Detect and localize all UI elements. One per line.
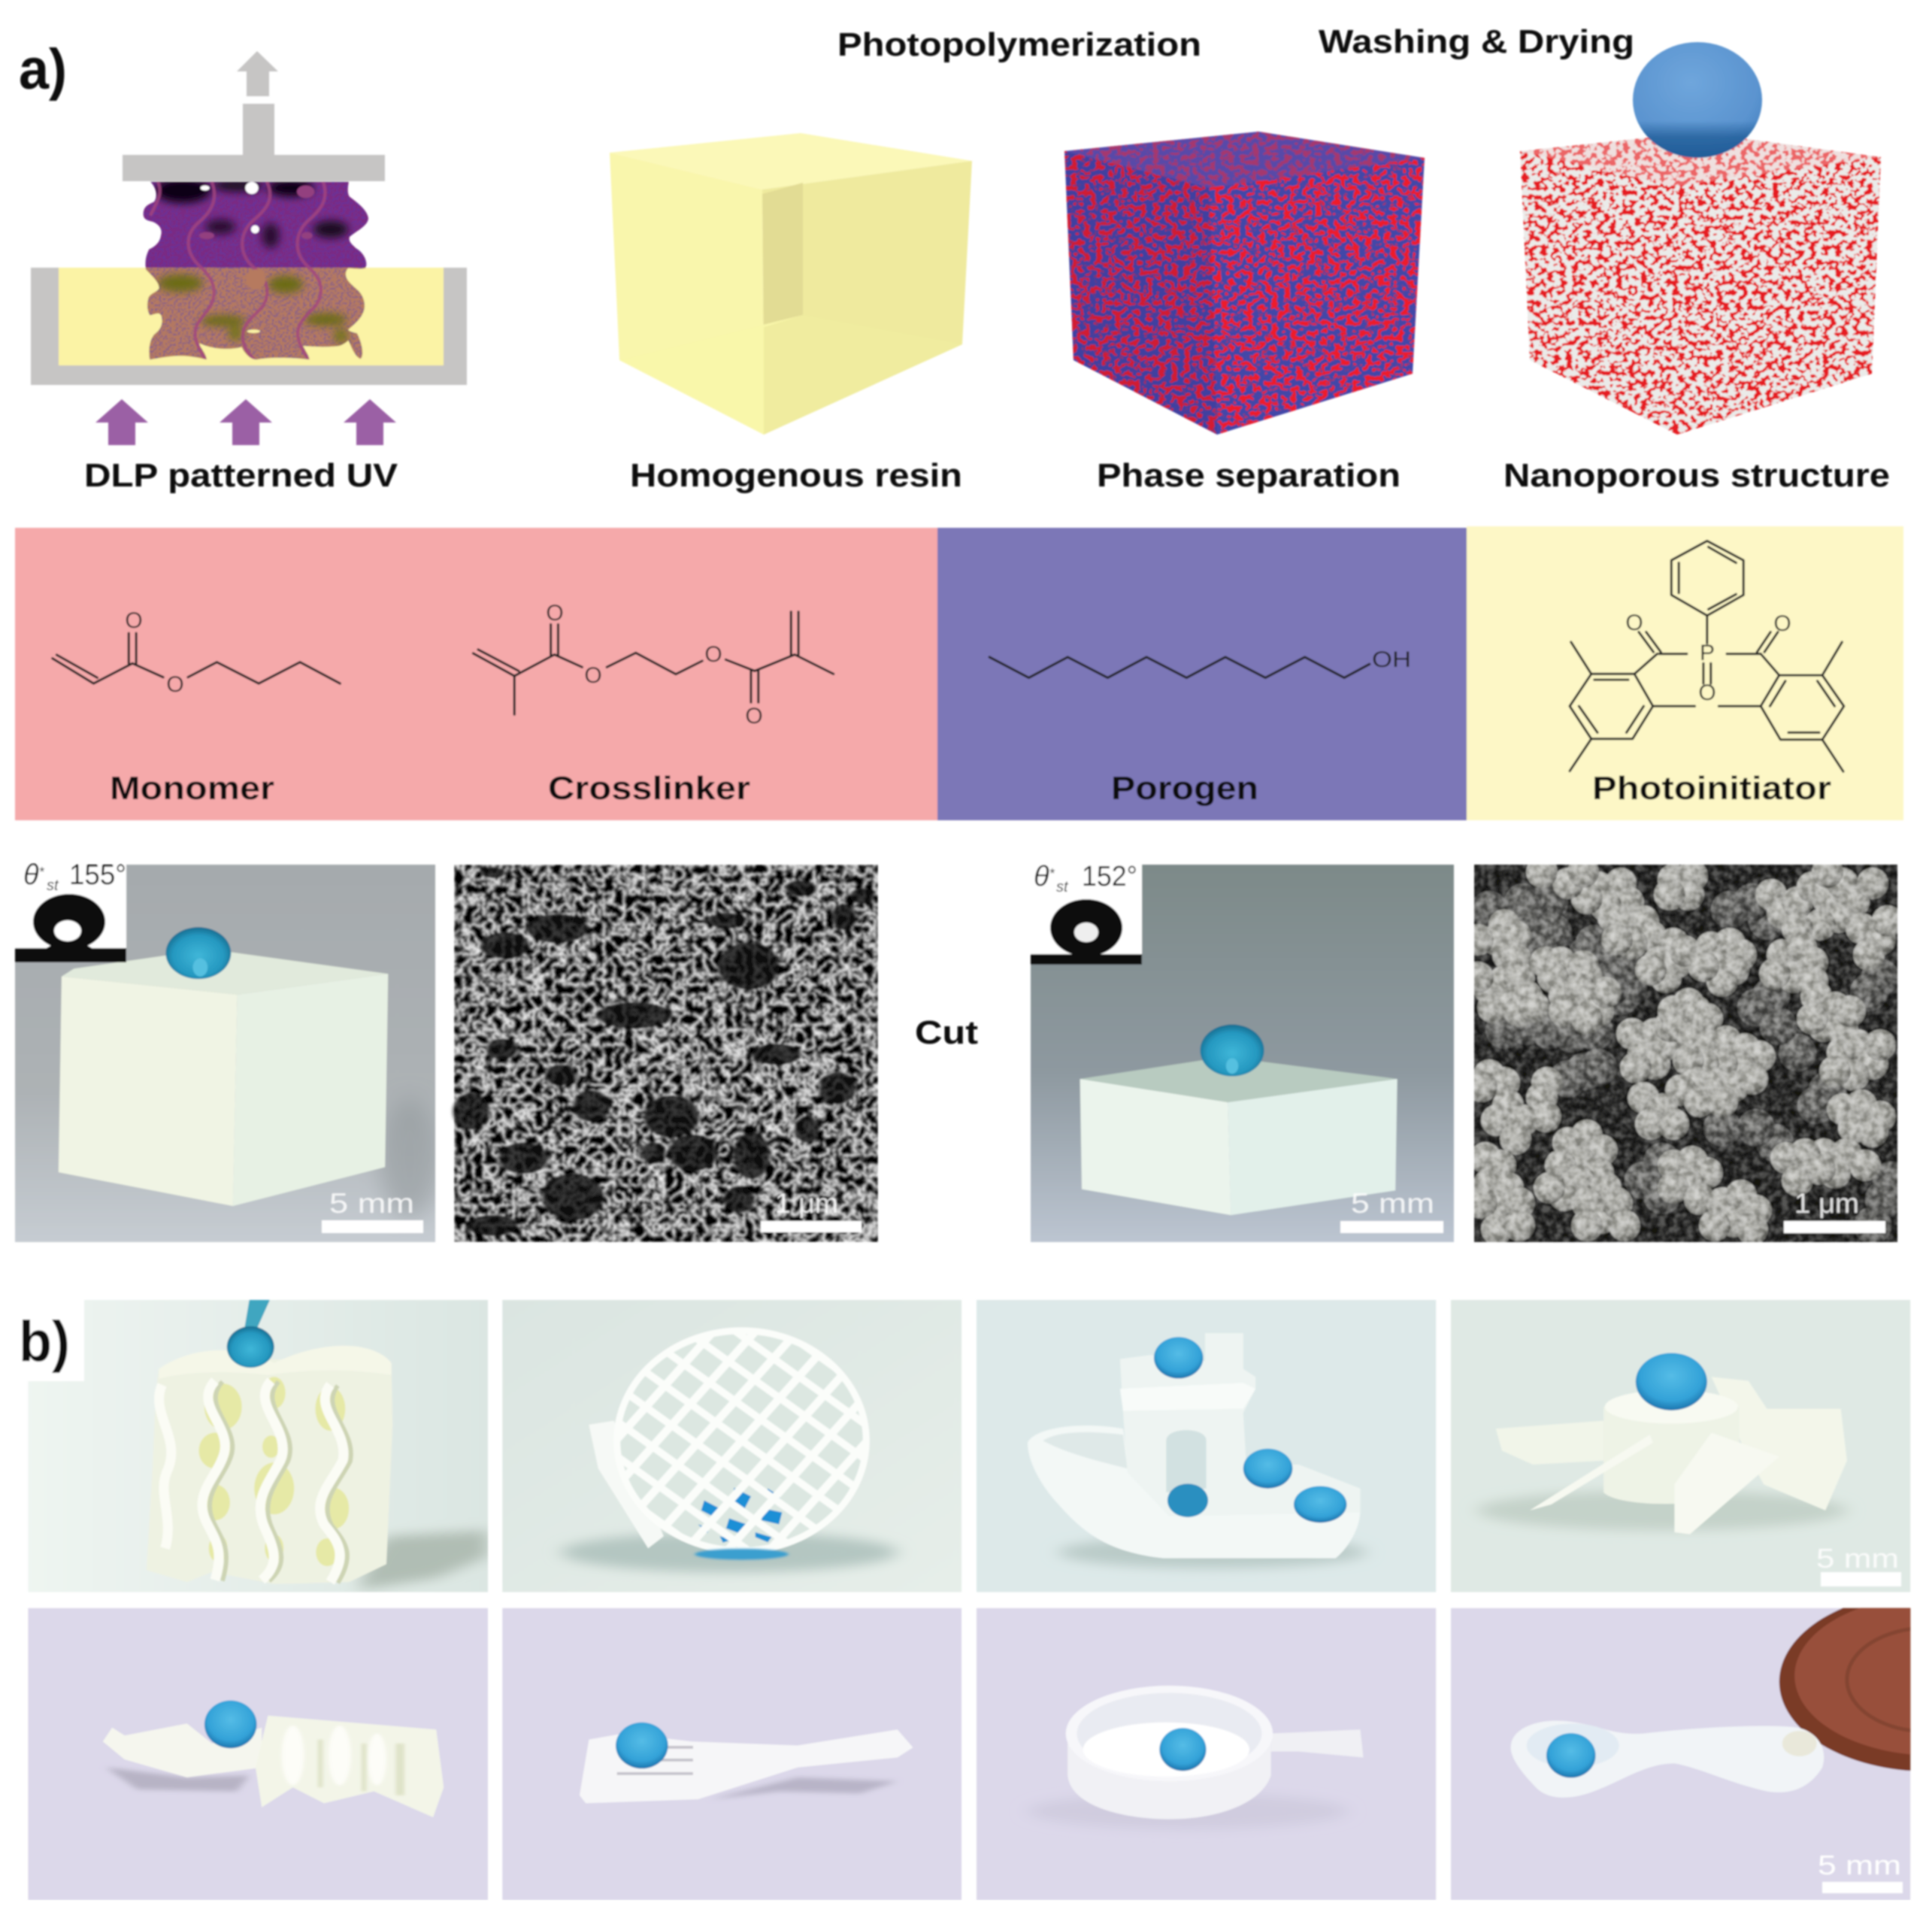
- molecule: decanol: [989, 647, 1411, 677]
- scale label: 5 mm: [1816, 1543, 1899, 1574]
- molecule: butyl acrylate: O: [166, 672, 184, 697]
- label: Monomer: Monomer: [110, 770, 274, 807]
- scale bar: [761, 1221, 862, 1232]
- arrow: build plate lift: [237, 51, 278, 96]
- contact angle inset 152: [1031, 861, 1142, 965]
- molecule: butyl acrylate: [53, 608, 340, 697]
- contact angle inset 155: 155°: [69, 859, 126, 891]
- molecule: BAPO: O: [1773, 611, 1791, 636]
- photo: tall nanoporous block: [15, 859, 440, 1242]
- droplet: [616, 1723, 668, 1768]
- molecule: EGDMA: O: [704, 642, 722, 667]
- resin vat: [31, 268, 467, 385]
- gyroid pores: [201, 182, 260, 333]
- contact angle inset 152: 152°: [1082, 861, 1137, 892]
- label: Crosslinker: Crosslinker: [548, 770, 750, 807]
- droplet: [204, 1701, 257, 1748]
- printed gyroid: [138, 178, 374, 366]
- pipette: [244, 1300, 270, 1329]
- label a): a): [19, 38, 67, 102]
- photo: cut nanoporous block: [1031, 861, 1454, 1242]
- caption: DLP patterned UV: DLP patterned UV: [84, 457, 398, 494]
- photo: gyroid cube: [28, 1300, 488, 1592]
- caption: Homogenous resin: Homogenous resin: [630, 457, 962, 494]
- scale bar: [1822, 1882, 1903, 1893]
- scale bar: [1784, 1221, 1885, 1233]
- scale label: 5 mm: [329, 1188, 414, 1219]
- label: Photoinitiator: Photoinitiator: [1592, 770, 1831, 807]
- contact angle inset 155: st: [47, 877, 59, 894]
- molecule: EGDMA: O: [584, 663, 602, 688]
- panel: porogen: [937, 528, 1467, 820]
- droplet: [165, 927, 231, 979]
- label b): b): [19, 1310, 70, 1374]
- photo: lattice sphere: [502, 1300, 961, 1592]
- droplet: [1200, 1025, 1264, 1077]
- build plate: [123, 104, 385, 181]
- label: Cut: Cut: [915, 1014, 978, 1051]
- water droplet on cube: [1633, 42, 1762, 158]
- blue liquid seen through lattice: [698, 1488, 782, 1543]
- contact angle inset 155: *: [39, 865, 45, 880]
- droplets: [1154, 1337, 1346, 1523]
- contact angle inset 152: θ: [1034, 861, 1049, 892]
- molecule: BAPO: O: [1698, 680, 1716, 705]
- scale label: 1 μm: [775, 1188, 838, 1219]
- droplet: [227, 1326, 274, 1368]
- heading: Washing & Drying: Washing & Drying: [1319, 23, 1634, 60]
- scale label: 5 mm: [1818, 1850, 1901, 1880]
- caption: Nanoporous structure: Nanoporous structure: [1504, 457, 1890, 494]
- label: Porogen: Porogen: [1111, 770, 1258, 807]
- molecule: BAPO: [1570, 541, 1844, 771]
- droplet: [1546, 1733, 1596, 1777]
- arrows: patterned UV light: [95, 399, 396, 445]
- molecule: EGDMA: O: [745, 704, 763, 729]
- contact angle inset 155: θ: [23, 859, 39, 891]
- photo: fork: [502, 1608, 961, 1900]
- beads: aggregate clusters: [1582, 871, 1614, 903]
- contact angle inset 155: [15, 859, 126, 962]
- cube: phase separation: [1052, 124, 1436, 440]
- contact angle inset 152: st: [1056, 879, 1069, 895]
- photo: spoon and coin: [1451, 1592, 1932, 1900]
- caption: Phase separation: Phase separation: [1097, 457, 1401, 494]
- photo: jaw model: [28, 1608, 488, 1900]
- cube: homogenous resin: [610, 133, 972, 435]
- scale bar: [1821, 1572, 1901, 1586]
- DLP printer schematic: [31, 51, 467, 445]
- SEM: fibrous network: [453, 865, 878, 1242]
- droplet: [1159, 1728, 1207, 1771]
- molecule: BAPO: O: [1625, 611, 1643, 635]
- molecule: EGDMA: [473, 601, 834, 729]
- molecule: EGDMA: O: [546, 601, 564, 626]
- droplet: [1636, 1353, 1707, 1410]
- molecule: decanol: OH: [1372, 647, 1411, 672]
- SEM: granular aggregates: [1462, 856, 1910, 1245]
- heading: Photopolymerization: Photopolymerization: [837, 26, 1201, 63]
- panel: photoinitiator: [1467, 526, 1903, 820]
- photo: pan: [977, 1608, 1436, 1900]
- panel: monomer and crosslinker: [15, 528, 937, 820]
- scale bar: [322, 1220, 423, 1233]
- molecule: butyl acrylate: O: [125, 608, 143, 633]
- photo: benchy boat: [977, 1300, 1436, 1592]
- scale label: 5 mm: [1351, 1188, 1434, 1219]
- molecule: BAPO: P: [1700, 641, 1715, 665]
- white tab behind label b: [0, 1300, 84, 1381]
- scale label: 1 μm: [1794, 1188, 1859, 1219]
- coin: [1779, 1592, 1932, 1771]
- photo: propeller: [1451, 1300, 1910, 1592]
- contact angle inset 152: *: [1049, 866, 1055, 881]
- scale bar: [1340, 1221, 1443, 1233]
- cube: nanoporous structure: [1519, 136, 1882, 436]
